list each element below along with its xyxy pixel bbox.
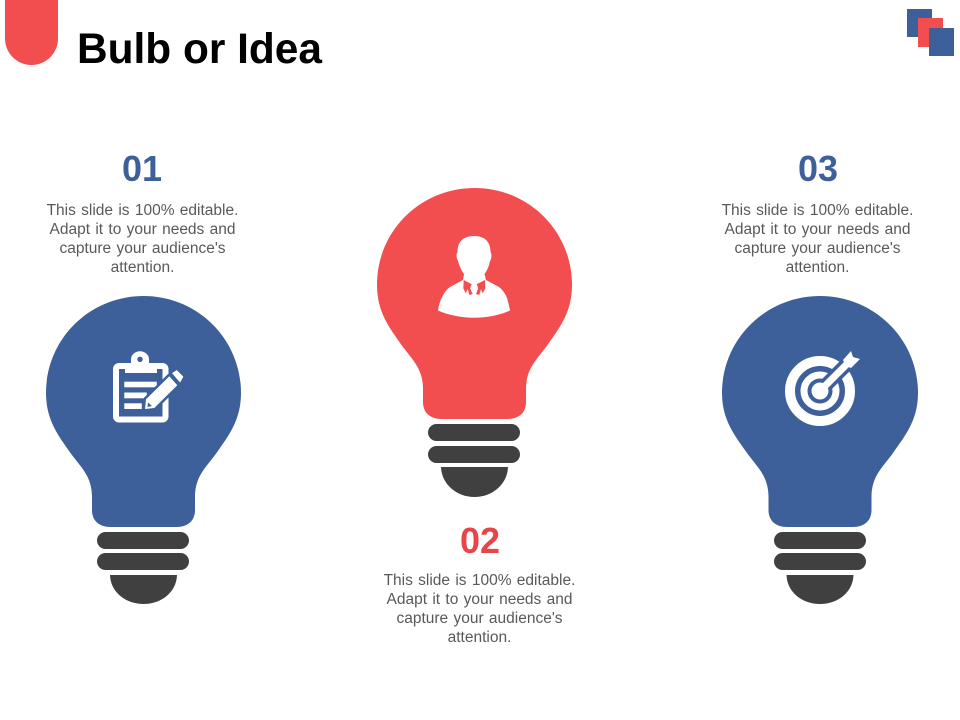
- text block 03: attention.: [786, 259, 849, 276]
- icon: target with arrow: [790, 351, 860, 421]
- text block 02: [384, 572, 575, 646]
- number 03: 03: [798, 148, 838, 189]
- title: Bulb or Idea: [77, 25, 322, 72]
- number 02: 02: [460, 520, 500, 561]
- bulb 1 (blue): [46, 296, 241, 604]
- text block 02: attention.: [448, 629, 511, 646]
- text block 01: [46, 202, 238, 276]
- text block 01: This slide is 100% editable.: [47, 202, 238, 219]
- text block 01: Adapt it to your needs and: [50, 221, 235, 238]
- icon: clipboard and pencil: [116, 351, 183, 420]
- icon: businessman: [438, 236, 510, 318]
- text block 03: capture your audience's: [734, 240, 901, 257]
- text block 03: This slide is 100% editable.: [722, 202, 913, 219]
- logo: overlapping squares: [907, 9, 954, 56]
- number 01: 01: [122, 148, 162, 189]
- text block 03: [722, 202, 913, 276]
- text block 02: capture your audience's: [396, 610, 563, 627]
- text block 02: Adapt it to your needs and: [387, 591, 572, 608]
- decorative red tab: [5, 0, 58, 65]
- text block 01: attention.: [111, 259, 174, 276]
- text block 01: capture your audience's: [59, 240, 226, 257]
- bulb 3 (blue): [722, 296, 918, 604]
- text block 02: This slide is 100% editable.: [384, 572, 575, 589]
- text block 03: Adapt it to your needs and: [725, 221, 910, 238]
- bulb 2 (red): [377, 188, 572, 497]
